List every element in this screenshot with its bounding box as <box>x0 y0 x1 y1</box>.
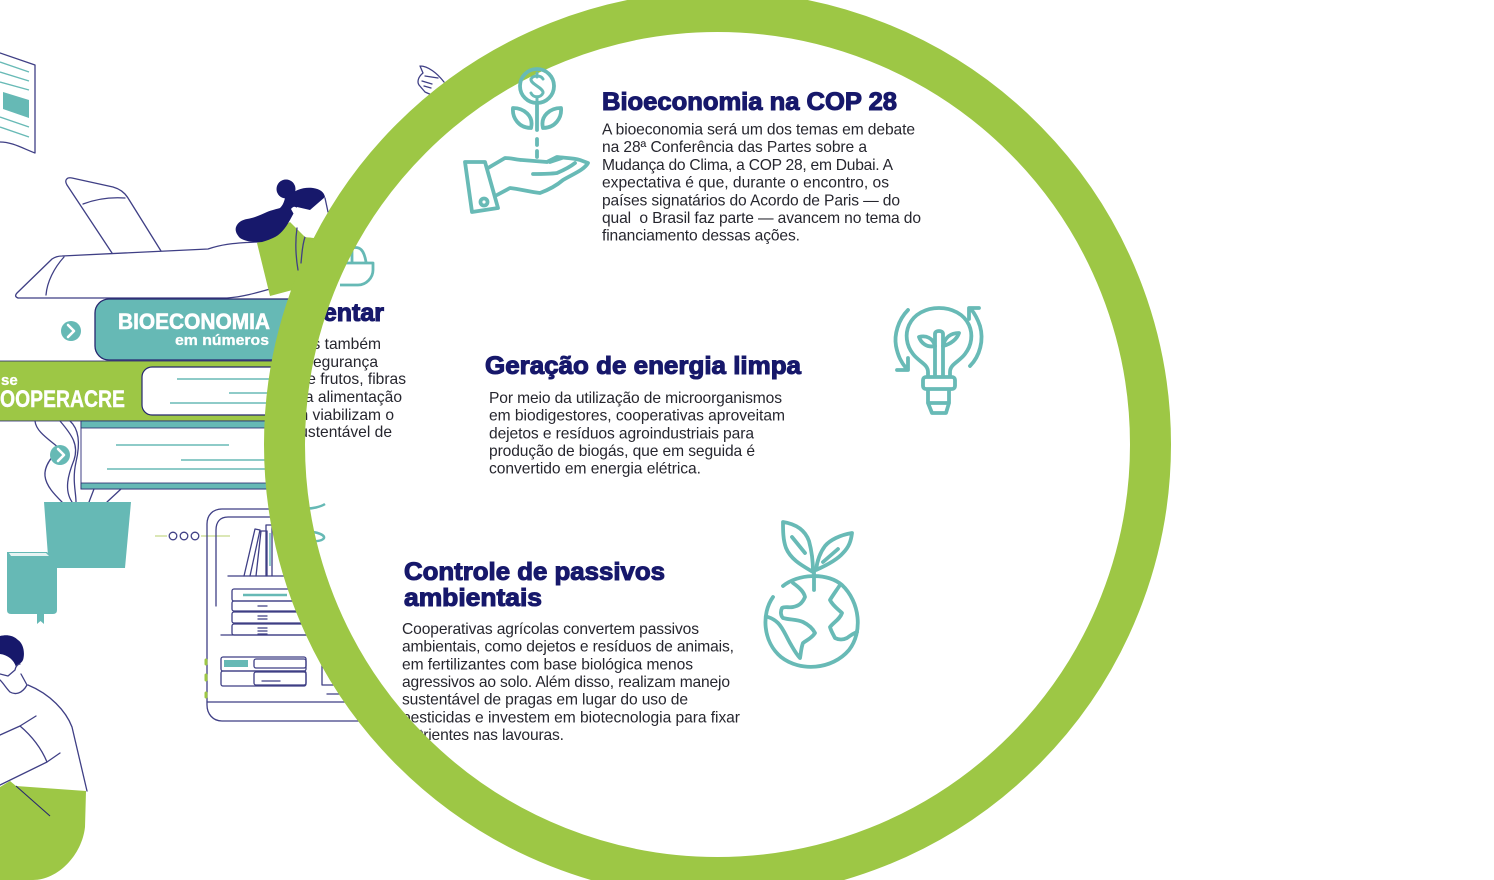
text block: food section (partly hidden): na alimentação <box>296 389 402 406</box>
text block: passivos ambientais: pesticidas e investem em biotecnologia para fixar <box>402 709 740 726</box>
text block: food section (partly hidden): tivas também <box>288 336 381 353</box>
label: se: se <box>1 372 18 389</box>
text block: food section (partly hidden) <box>287 336 406 441</box>
heading: Geração de energia limpa: Geração de energia limpa <box>485 352 802 380</box>
text block: energia limpa: produção de biogás, que em seguida é <box>489 443 755 460</box>
heading: Bioeconomia na COP 28: Bioeconomia na COP 28 <box>602 88 897 116</box>
text block: COP 28: Mudança do Clima, a COP 28, em Dubai. A <box>602 157 894 174</box>
left illustration: open book <box>0 53 35 153</box>
text block: COP 28: expectativa é que, durante o encontro, os <box>602 175 889 192</box>
icon: chevron button 2 <box>50 445 70 465</box>
icon: chevron button 1 <box>61 321 81 341</box>
small hand sketch at top <box>418 66 444 96</box>
text block: passivos ambientais: Cooperativas agrícolas convertem passivos <box>402 621 699 638</box>
icon: hand with money plant <box>465 69 588 212</box>
text block: COP 28: financiamento dessas ações. <box>602 228 800 245</box>
illustration: seated person <box>0 635 87 880</box>
heading: Controle de passivos ambientais: ambientais <box>404 584 542 612</box>
label: BIOECONOMIA: BIOECONOMIA <box>118 309 270 334</box>
heading: Controle de passivos ambientais <box>404 558 665 612</box>
text block: COP 28 <box>602 122 921 245</box>
text block: passivos ambientais <box>402 621 740 744</box>
text block: food section (partly hidden): de frutos, fibras <box>299 371 406 388</box>
text block: COP 28: A bioeconomia será um dos temas em debate <box>602 122 915 138</box>
text block: food section (partly hidden): sustentável de <box>291 424 392 441</box>
section heading: Alimentar (partly hidden): limentar <box>287 299 384 327</box>
icon: globe with sprout <box>765 522 858 667</box>
heading: Controle de passivos ambientais: Controle de passivos <box>404 558 665 586</box>
book: Bioeconomia em números <box>95 299 310 360</box>
illustration: teal book <box>7 552 57 624</box>
label: em números: em números <box>175 332 269 349</box>
text block: food section (partly hidden): a segurança <box>292 354 378 371</box>
text block: energia limpa: em biodigestores, cooperativas aproveitam <box>489 408 785 425</box>
text block: passivos ambientais: em fertilizantes com base biológica menos <box>402 656 693 673</box>
text block: passivos ambientais: sustentável de pragas em lugar do uso de <box>402 692 688 709</box>
text block: energia limpa: dejetos e resíduos agroindustriais para <box>489 425 754 442</box>
illustration: tablet with bookshelf <box>206 509 360 721</box>
text block: COP 28: qual o Brasil faz parte — avancem no tema do <box>602 210 921 227</box>
decorative label: three dots line <box>155 532 230 540</box>
text block: COP 28: países signatários do Acordo de Paris — do <box>602 192 900 209</box>
text block: passivos ambientais: agressivos ao solo. Além disso, realizam manejo <box>402 674 730 691</box>
text block: passivos ambientais: nutrientes nas lavouras. <box>402 727 564 744</box>
text block: energia limpa: convertido em energia elétrica. <box>489 461 701 478</box>
text block: COP 28: na 28ª Conferência das Partes sobre a <box>602 139 867 156</box>
illustration: plant pot <box>35 421 131 568</box>
text block: passivos ambientais: ambientais, como dejetos e resíduos de animais, <box>402 639 734 656</box>
green ring <box>284 12 1150 878</box>
book: Cooperacre <box>0 361 292 421</box>
text block: energia limpa <box>489 390 785 478</box>
book: white pages <box>81 421 290 489</box>
illustration: woman lying on books <box>16 178 330 298</box>
icon: light bulb with sprout <box>896 308 982 413</box>
teal swirls partly hidden <box>300 504 325 541</box>
icon: food bowl partly hidden <box>330 248 373 285</box>
text block: food section (partly hidden): em viabilizam o <box>287 407 394 424</box>
text block: energia limpa: Por meio da utilização de microorganismos <box>489 390 782 407</box>
